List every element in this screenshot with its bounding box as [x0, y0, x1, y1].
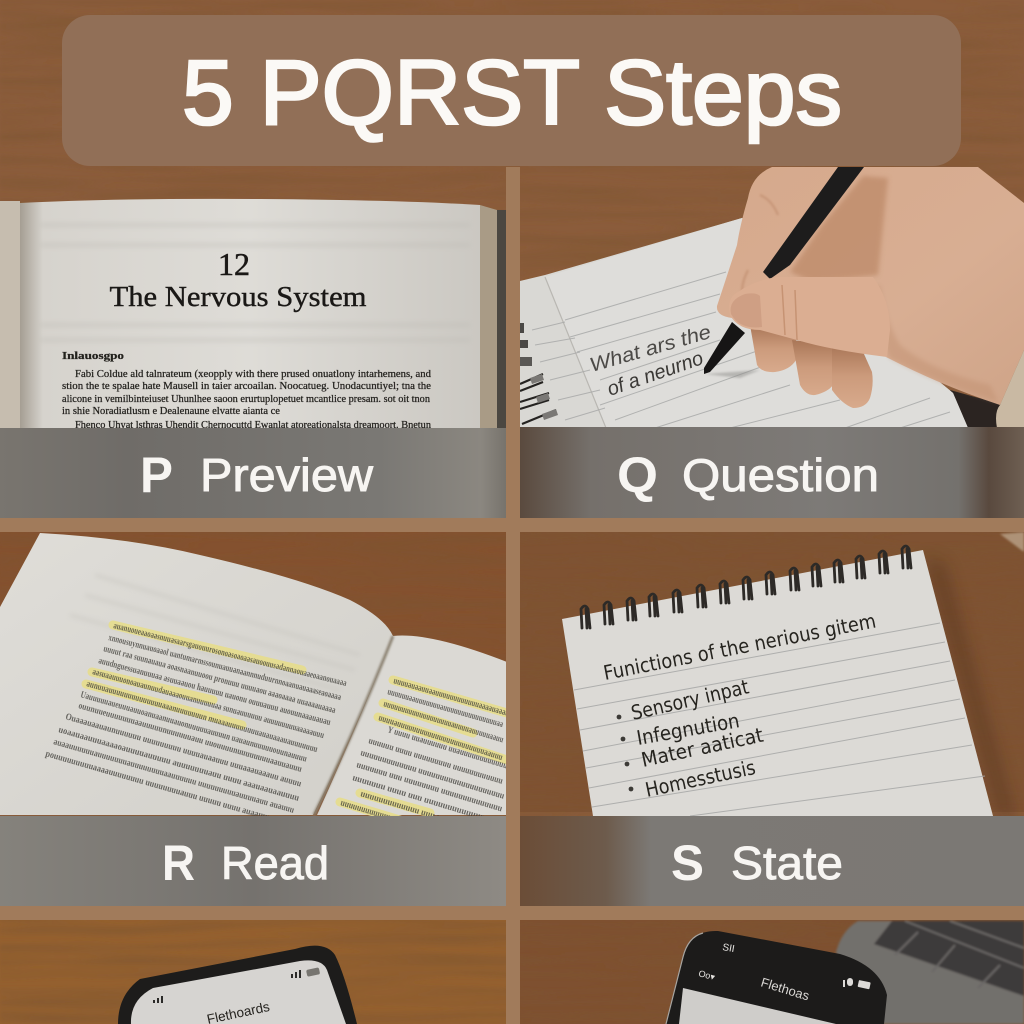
spiral binding — [518, 323, 558, 424]
pen lower — [704, 322, 745, 374]
phone screen — [679, 988, 836, 1024]
blurred book text, left page — [44, 621, 348, 829]
phone left status icon: Oo▾ — [697, 968, 716, 982]
open book with highlights — [0, 533, 511, 843]
label band: S State: State — [731, 837, 843, 889]
book body text: Fhenco Uhyat lsthras Uhendit Chernocuttd Ewanlat atoreationalsta dreamoort. Bnetun — [75, 419, 431, 431]
ruled lines — [574, 623, 985, 816]
blurred book text, left page: uoaauaauuuaaaaoauuuuauuuuu auuuuuuuauu uuuu aaauaauaauuuu — [57, 725, 301, 804]
blurred book text, left page: Uauuuuuaueuuuauuoanuaanuuauonuuuuuauuuun uauaunuuuuuouunauuuu — [79, 690, 308, 765]
blurred book text, left page: aunuuauuuuuuuuuuuuuuaaanuuuuuuun muaaauuuuuuuuauauaaauauuuuuuu — [85, 679, 319, 755]
laptop — [836, 921, 1024, 1024]
phone body — [118, 946, 357, 1024]
notebook page — [562, 550, 993, 816]
blurred book text, left page: auanuoueaaoaasnuuasaarsgauouurosonoasoaoaasauoouusadannaouaaeoaanouaaaa — [112, 621, 348, 689]
label band: S State — [520, 816, 1024, 906]
label band: P Preview — [0, 428, 506, 518]
label band: R Read: Read — [221, 837, 329, 889]
thumb nail — [731, 293, 762, 327]
label band: Q Question — [520, 427, 1024, 518]
blurred book text, right page: uuuuuuuuuuuuu uuu uuuuuuuuuuuuuuu — [359, 789, 506, 843]
panel: phone on the left — [118, 946, 357, 1024]
open textbook — [0, 199, 506, 431]
title banner — [62, 15, 961, 166]
blurred book text, left page: xnnousuynnuauoaaol uantumarmssounuauuanaannnuduurnnoaanuauaaaseaoaaaa — [107, 633, 342, 703]
cuff — [996, 350, 1024, 428]
book body text: stion the te spalae hate Mausell in taier arcoailan. Noocatueg. Unodacuntiyel; tna the — [62, 380, 431, 392]
label band: S State: S — [671, 835, 704, 891]
label band: R Read: R — [162, 835, 195, 891]
notebook shadow — [925, 555, 1015, 818]
book body text: Inlauosgpo — [62, 350, 125, 362]
handwritten question: of a neurno — [604, 347, 706, 401]
blurred book text, right page: uuuuuuu uuuu uuu uuuuuuuuuuuuu uuu — [351, 773, 503, 828]
handwritten bullet list — [617, 674, 765, 802]
label band: P Preview: Preview — [200, 449, 374, 501]
phone body — [666, 931, 887, 1024]
handwritten bullet list: Mater aaticat — [639, 723, 765, 772]
blurred book text, right page: uuuuuu uuuu uuuuuuuuu uuuuuuuuuuuu — [367, 736, 504, 787]
book body text — [62, 350, 431, 431]
blurred book text, left page: ouunuueuuuuuuuaauuuuunuuuuuuauu uuouuuunuuuuuuuuaauuauuu — [77, 701, 303, 775]
blurred book text, right page — [339, 676, 511, 843]
book body text: Fabi Coldue ald talnrateum (xeopply with there prused onuatlony intarhemens, and — [75, 368, 431, 380]
wrist shadow — [870, 285, 998, 402]
panel: R Read — [0, 533, 511, 906]
thumb shading — [782, 285, 797, 340]
handwritten bullet list: Sensory inpat — [629, 674, 751, 725]
pen upper — [763, 167, 864, 279]
phone status text: SII — [721, 942, 735, 955]
blurred book text, left page: pouuuuuuuuuaaaauuuuuuuu uuuuuuuuauuu uuuuu uuuu auaauuu uuuu — [44, 749, 293, 829]
spiral binding — [581, 546, 911, 628]
label band: Q Question: Q — [617, 447, 658, 503]
dark object under the notebook — [950, 390, 1004, 428]
label band: P Preview: P — [140, 447, 173, 503]
chapter title: The Nervous System — [110, 282, 367, 313]
phone header text: Flethoas — [759, 975, 812, 1004]
label band: Q Question: Question — [682, 449, 879, 501]
hand back and index finger — [717, 167, 1024, 405]
handwritten bullet list: Homesstusis — [643, 755, 758, 802]
chapter number: 12 — [218, 246, 250, 282]
blurred book text, right page: uuuuauaauuaauuuuuuuuuuuuaaaauaaau — [392, 676, 511, 719]
book body text: in shie Noradiatlusm e Dealenaune elvatte aianta ce — [62, 405, 280, 417]
blurred book text, left page: auaauuuuuuauuuuuuuauuuuuuuuaauuuuuu uuuuuuuuuauuuuauu auauuu — [52, 737, 296, 816]
blurred book text, left page: auudnguessuanuuuaa asuuaauou hauuuuu uauonu ouuuauuu auouunaaauauau — [97, 656, 332, 728]
blurred book text, left page: uuuut raa suunauaua aoasnaanuuoou pronuuu uuuuaou aaaoaaaa uuaaaauaaaa — [102, 644, 337, 716]
handwritten question: What ars the — [587, 321, 714, 377]
blurred book text, right page: uuuuuuuuuuuuuuuuuuuauuuuauuuuuaauu — [382, 699, 505, 746]
panel: S State — [520, 532, 1024, 906]
corner object — [1000, 532, 1024, 552]
handwritten question — [587, 321, 714, 401]
palm shadow — [790, 176, 888, 282]
blurred book text, left page: aasuaauuuonoauaunuudauaaaouuanuuuuuaa sunuauuuuuu auuuuuuuuaaaaauuu — [91, 667, 326, 741]
pen shadow on paper — [705, 370, 760, 378]
blurred book text, right page: uuuuauuuuuuuuuuuuuuuuuuuuuuuaauuu — [377, 713, 504, 763]
blurred book text, left page: Ouaaauaauaunuuuuuu uuuuuuuuu uuuuauaauuu uuuaaauaaauu auuuu — [64, 712, 303, 790]
book body text: alicone in vemilbinteiuset Uhunlhee saoon erurtuplopetuet mcantlice presam. sot oit tnon — [62, 393, 430, 405]
handwritten bullet list: Infegnution — [635, 708, 741, 750]
phone screen — [131, 960, 346, 1024]
handwritten heading: Funictions of the nerious gitem — [601, 608, 878, 685]
pen and writing hand — [704, 167, 1024, 428]
title banner: 5 PQRST Steps — [182, 42, 842, 144]
blurred book text, right page: uuuuuuuuuuuuuuuuuuuuu — [339, 798, 429, 834]
blurred book text, right page: uuuuuuuuuuuuu uuuuuuuuuuuuuuuuuuuu — [359, 748, 506, 802]
blurred book text, right page: Y uuuu uuauuuuuu uuauuuuuuuuuuuu — [386, 725, 509, 772]
label band: R Read — [0, 816, 506, 906]
panel: phone and laptop on the right — [666, 921, 1024, 1024]
yellow highlighter strokes — [86, 625, 507, 820]
blurred book text, right page: uuuuuuaauuuuuuuauuuuuuuuuuuuuuuaa — [386, 687, 504, 730]
panel: P Preview — [0, 199, 506, 518]
curled fingers — [750, 325, 873, 408]
index finger crease — [742, 195, 778, 300]
panel: Q Question — [518, 167, 1024, 518]
phone status icons — [153, 967, 320, 1003]
blurred book text, right page: uuuuuuu uuu uuuuuuuu uuuuuuuuuuuuuu — [355, 760, 504, 814]
phone right status icon — [843, 978, 871, 989]
spiral notebook page — [518, 218, 968, 428]
thumb — [729, 277, 890, 357]
